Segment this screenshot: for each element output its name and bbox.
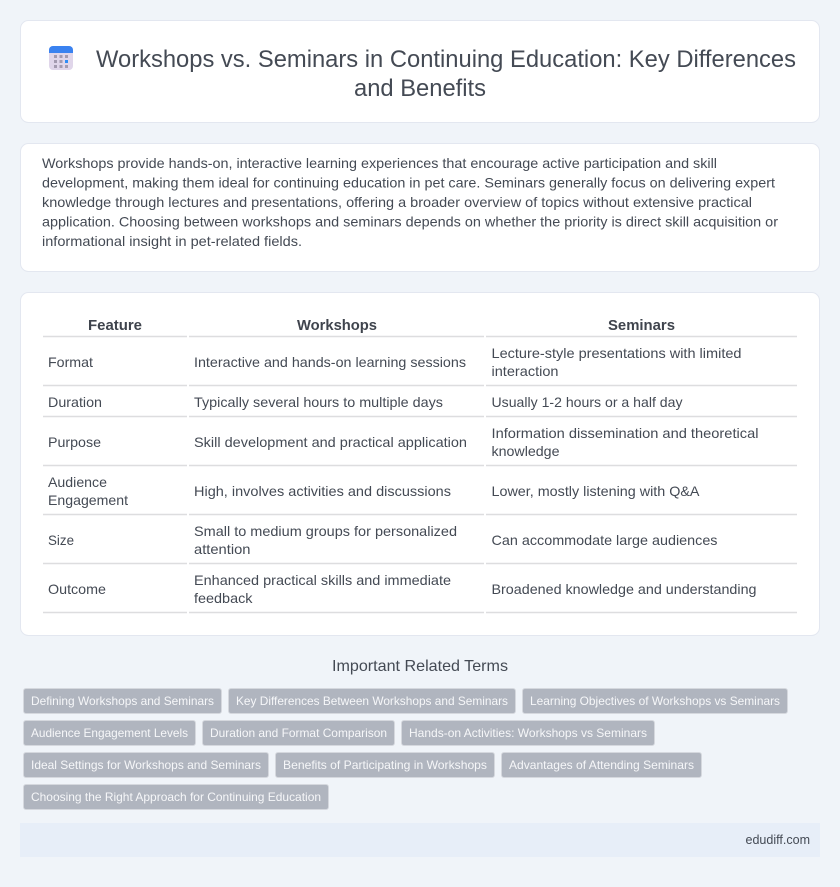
tag: Defining Workshops and Seminars — [31, 694, 214, 708]
tag: Key Differences Between Workshops and Seminars — [236, 694, 508, 708]
tag: Advantages of Attending Seminars — [509, 758, 694, 772]
panel: summary paragraph: development, making them ideal for continuing education in pet care. Seminars generally focus on delivering expert — [42, 174, 775, 190]
row: format: Format — [48, 354, 93, 370]
row: purpose: Skill development and practical application — [194, 434, 467, 450]
title — [96, 46, 796, 102]
tag — [502, 752, 702, 778]
tag — [522, 688, 788, 714]
table header — [88, 317, 675, 334]
panel: summary paragraph: application. Choosing between workshops and seminars depends on whether the priority is direct skill acquisition or — [42, 214, 778, 230]
table header: Feature — [88, 317, 142, 334]
row: size: Can accommodate large audiences — [492, 532, 718, 548]
row: size: Size — [48, 532, 74, 548]
row: audience engagement: High, involves activities and discussions — [194, 483, 451, 499]
row: duration: Usually 1-2 hours or a half day — [492, 394, 682, 410]
row: outcome: Broadened knowledge and understanding — [492, 581, 756, 597]
row: outcome — [48, 572, 756, 606]
row: audience engagement: Lower, mostly listening with Q&A — [492, 483, 700, 499]
row: duration: Typically several hours to multiple days — [194, 394, 443, 410]
panel: summary paragraph: knowledge through lectures and presentations, offering a broader overview of topics without extensive practical — [42, 194, 752, 210]
row: duration — [48, 394, 682, 410]
tag — [402, 720, 654, 746]
row: purpose: Purpose — [48, 434, 101, 450]
row: audience engagement: Audience — [48, 474, 107, 490]
header panel — [20, 20, 820, 122]
tag: Audience Engagement Levels — [31, 726, 188, 740]
title: Workshops vs. Seminars in Continuing Education: Key Differences — [96, 46, 796, 73]
row: format — [48, 345, 742, 379]
tag — [24, 720, 196, 746]
tag: Benefits of Participating in Workshops — [283, 758, 487, 772]
row: audience engagement — [48, 474, 700, 508]
row: outcome: feedback — [194, 590, 254, 606]
panel: summary paragraph: Workshops provide hands-on, interactive learning experiences that encourage active participation and skill — [42, 155, 717, 171]
table header: Seminars — [608, 317, 675, 334]
panel: comparison table — [20, 292, 820, 636]
row: size — [48, 523, 718, 557]
row: format: interaction — [492, 363, 558, 379]
row: duration: Duration — [48, 394, 102, 410]
row: format: Interactive and hands-on learning sessions — [194, 354, 466, 370]
row: outcome: Outcome — [48, 581, 106, 597]
title: and Benefits — [354, 75, 486, 102]
row: audience engagement: Engagement — [48, 492, 128, 508]
tag — [276, 752, 494, 778]
row: purpose: Information dissemination and theoretical — [492, 425, 758, 441]
row: size: attention — [194, 541, 250, 557]
row: purpose: knowledge — [492, 443, 560, 459]
footer — [20, 823, 820, 857]
row: outcome: Enhanced practical skills and immediate — [194, 572, 451, 588]
related term tags — [24, 688, 788, 810]
tag: Hands-on Activities: Workshops vs Seminars — [409, 726, 647, 740]
tag: Duration and Format Comparison — [210, 726, 387, 740]
tag — [24, 784, 328, 810]
table header: Workshops — [297, 317, 377, 334]
row: purpose — [48, 425, 758, 459]
heading: related terms: Important Related Terms — [332, 658, 508, 675]
tag — [24, 752, 268, 778]
tag — [202, 720, 394, 746]
panel: summary paragraph: informational insight in pet-related fields. — [42, 233, 302, 249]
tag — [228, 688, 516, 714]
tag: Ideal Settings for Workshops and Seminars — [31, 758, 261, 772]
tag: Choosing the Right Approach for Continuing Education — [31, 790, 321, 804]
tag: Learning Objectives of Workshops vs Seminars — [530, 694, 780, 708]
icon: calendar — [49, 46, 73, 70]
row: format: Lecture-style presentations with limited — [492, 345, 742, 361]
footer: edudiff.com — [746, 832, 810, 847]
row: size: Small to medium groups for personalized — [194, 523, 457, 539]
panel: summary paragraph — [20, 144, 820, 272]
tag — [24, 688, 222, 714]
